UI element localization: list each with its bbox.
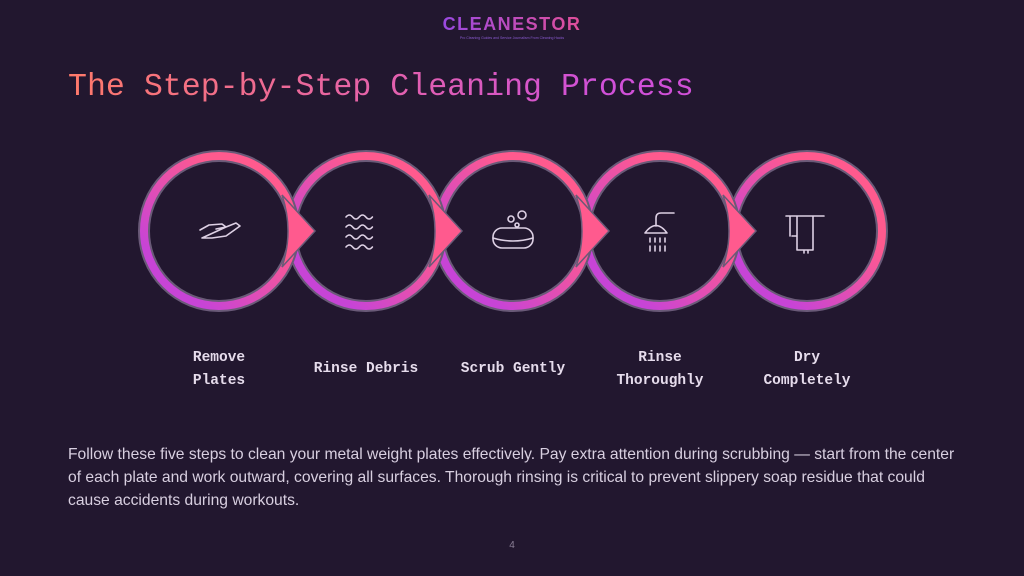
body text: cause accidents during workouts. [68,492,299,509]
icon: soap [493,211,533,248]
logo: Pro Cleaning Guides and Service Journalism From Cleaning Hacks [460,36,564,40]
label: step 1: Remove [193,350,245,366]
label: step 2: Rinse Debris [314,361,418,377]
body text: of each plate and work outward, covering all surfaces. Thorough rinsing is critical to prevent slippery soap residue that could [68,469,925,486]
title: The Step-by-Step Cleaning Process [68,70,694,105]
label: step 5: Completely [763,373,850,389]
body text [68,446,954,509]
icon: waves [346,215,372,249]
body text: Follow these five steps to clean your metal weight plates effectively. Pay extra attention during scrubbing — start from the center [68,446,954,463]
step 2 circle with arrow [286,151,462,311]
step 4 circle with arrow [580,151,756,311]
logo: CLEANESTOR [443,14,581,34]
icon: towel [786,216,824,253]
label: step 5: Dry [794,350,820,366]
label: step 1 [193,350,245,389]
icon: shower [645,213,674,251]
step 3 circle with arrow [433,151,609,311]
label: step 5 [763,350,850,389]
label: step 4: Thoroughly [616,373,704,389]
page number: 4 [509,540,515,551]
icon: hand [200,223,240,238]
label: step 1: Plates [193,373,245,389]
label: step 4 [616,350,704,389]
label: step 3: Scrub Gently [461,361,565,377]
step 1 circle with arrow [139,151,315,311]
step 5 circle [727,151,887,311]
label: step 4: Rinse [638,350,682,366]
